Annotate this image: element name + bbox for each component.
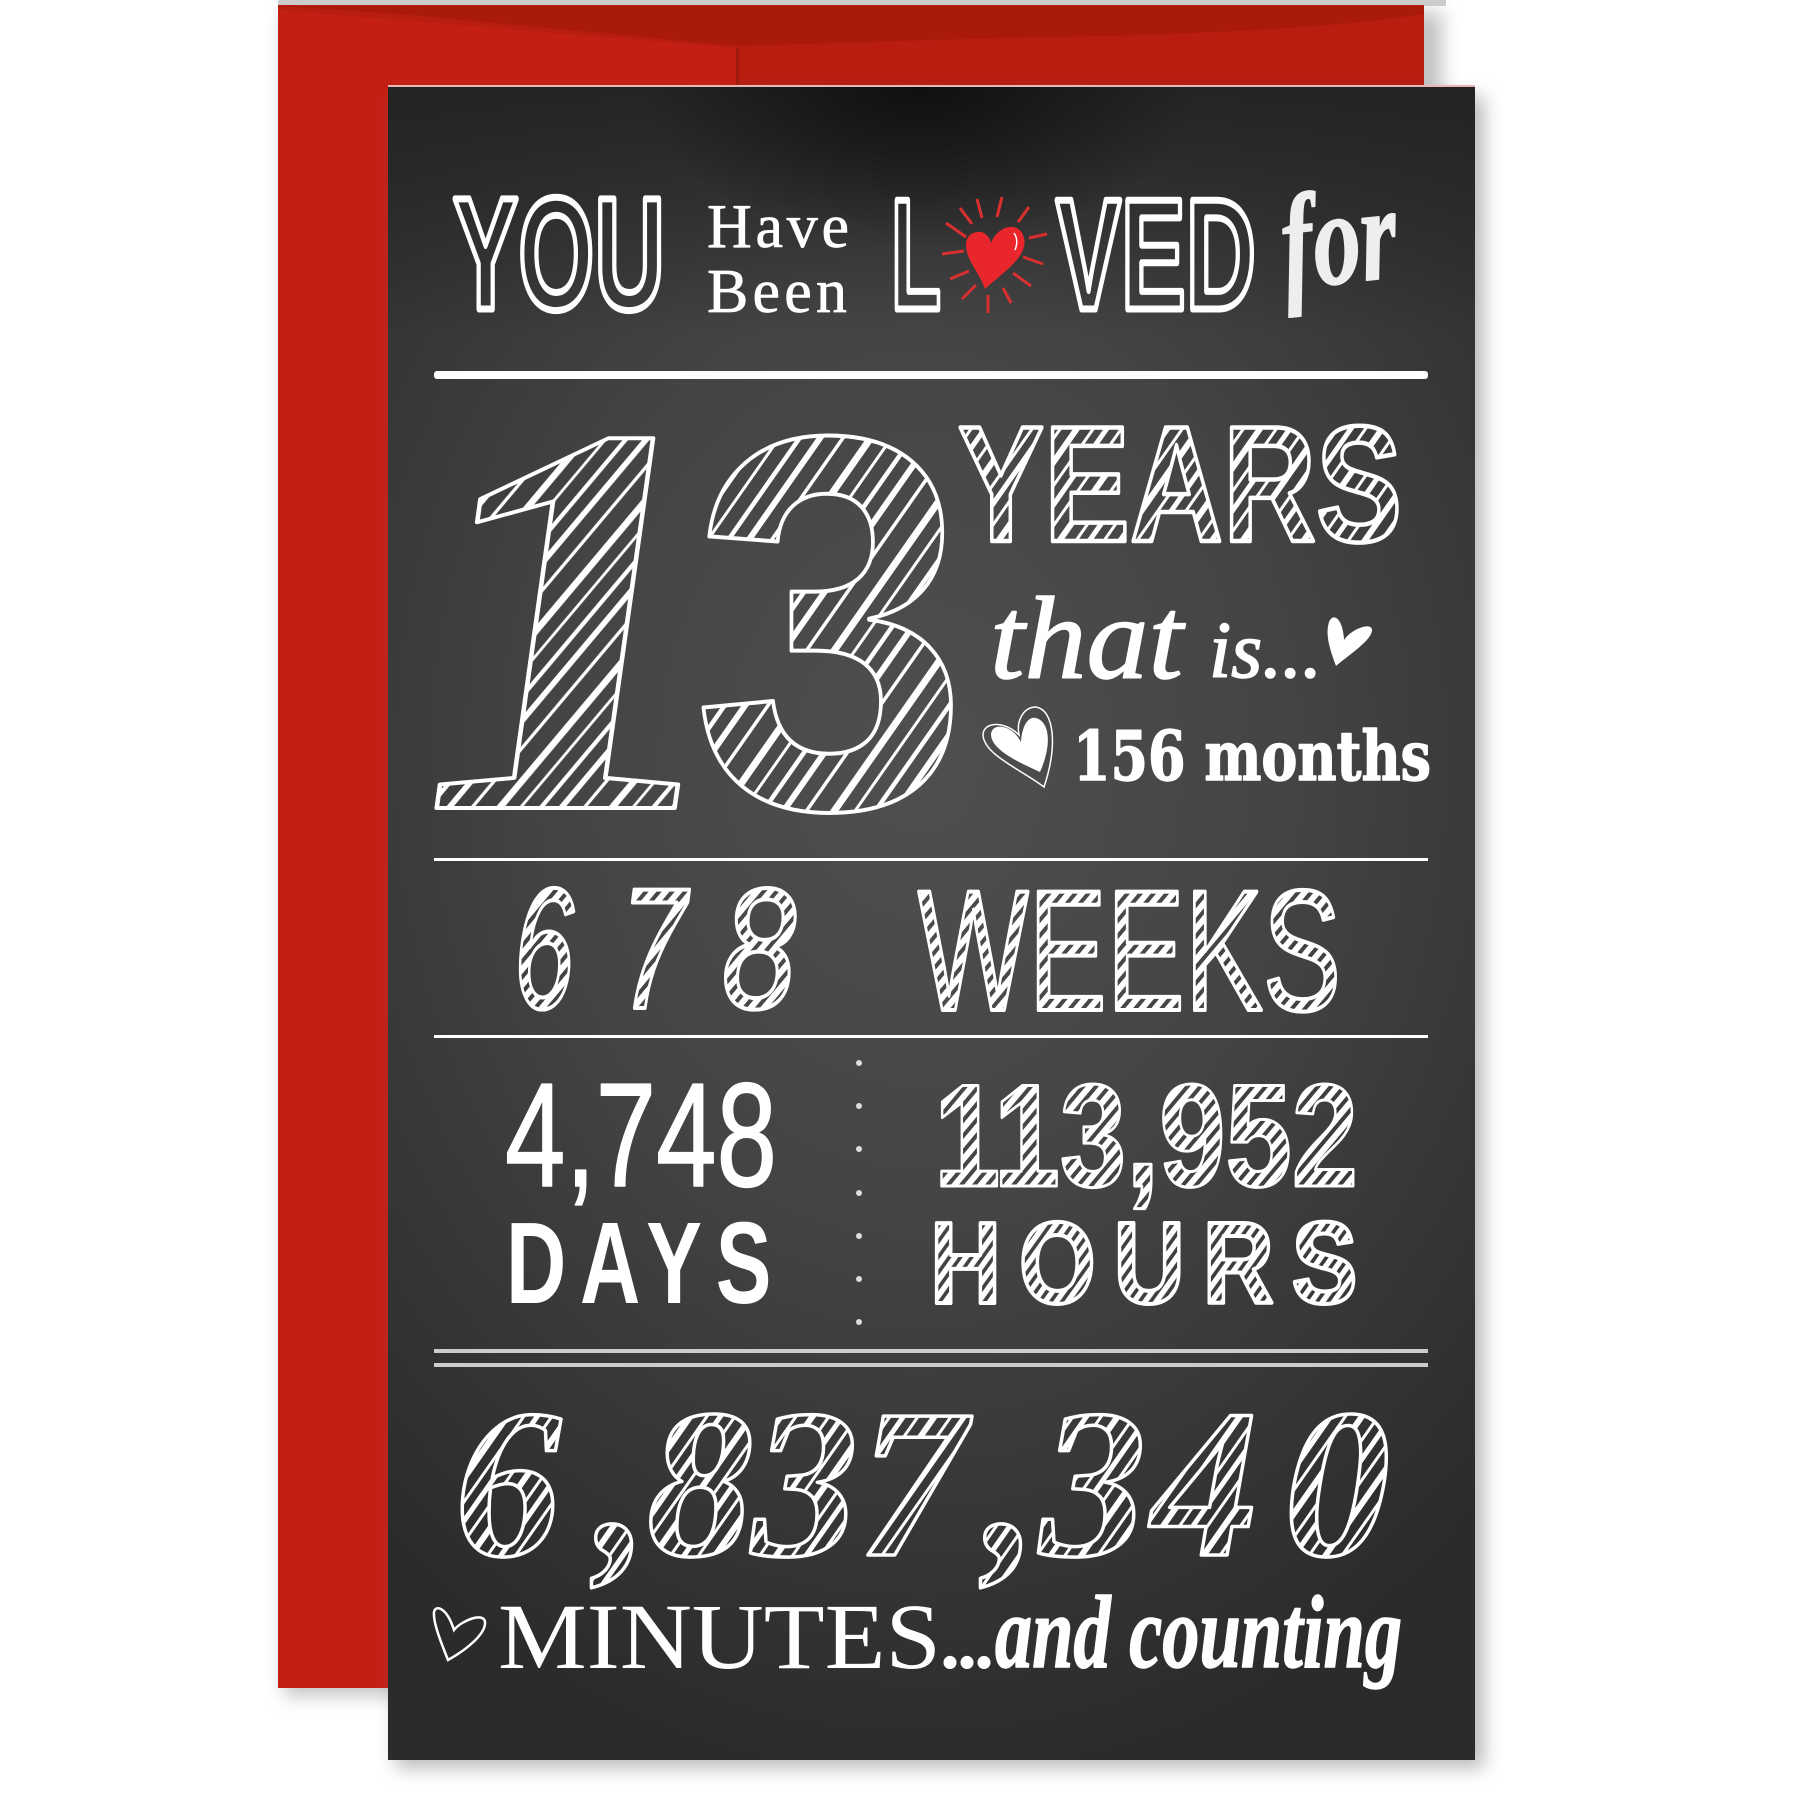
678: 8 — [722, 853, 796, 1045]
and counting: and counting — [995, 1575, 1402, 1690]
VED: VED — [1056, 167, 1256, 343]
big number 13: 1 — [368, 309, 778, 929]
title: you have been loved for — [453, 158, 1405, 343]
678: 6 — [514, 853, 574, 1045]
YEARS: YEARS — [958, 392, 1402, 576]
dividers — [434, 371, 1428, 1367]
is...: is... — [1209, 607, 1322, 695]
HOURS: HOURS — [930, 1198, 1375, 1328]
icon: outlined heart — [983, 707, 1052, 787]
that: that — [990, 573, 1186, 704]
DAYS: DAYS — [506, 1200, 785, 1328]
ellipsis: ... — [940, 1598, 994, 1686]
678 — [514, 853, 796, 1045]
YOU: YOU — [453, 164, 665, 343]
for: for — [1273, 158, 1405, 319]
envelope — [278, 0, 1446, 1696]
that is — [990, 573, 1372, 704]
WEEKS: WEEKS — [918, 855, 1341, 1047]
card shadow — [396, 96, 1484, 1768]
Have Been: Been — [707, 258, 847, 326]
envelope left flap — [278, 10, 736, 1688]
minutes number: 6,837,340 — [455, 1366, 1390, 1601]
MINUTES: MINUTES — [498, 1586, 941, 1689]
icon: red heart with rays — [942, 197, 1047, 313]
156 months row — [983, 707, 1431, 797]
minutes and counting — [434, 1575, 1402, 1690]
678 weeks — [514, 853, 1341, 1047]
days column — [505, 1053, 785, 1328]
156 months: 156 months — [1073, 717, 1431, 797]
Have Been: Have — [707, 193, 849, 261]
big number 13 — [368, 309, 969, 929]
envelope top flap — [278, 6, 1424, 46]
dotted separator — [856, 1060, 862, 1325]
678: 7 — [620, 853, 690, 1045]
icon: small heart — [1328, 617, 1372, 666]
Have Been — [707, 193, 849, 326]
L: L — [891, 167, 941, 343]
4,748: 4,748 — [505, 1053, 777, 1218]
icon: outline heart — [434, 1608, 485, 1660]
113,952: 113,952 — [934, 1054, 1358, 1217]
hours column — [930, 1054, 1375, 1328]
chalkboard card — [388, 85, 1475, 1760]
big number 13: 3 — [692, 325, 969, 920]
